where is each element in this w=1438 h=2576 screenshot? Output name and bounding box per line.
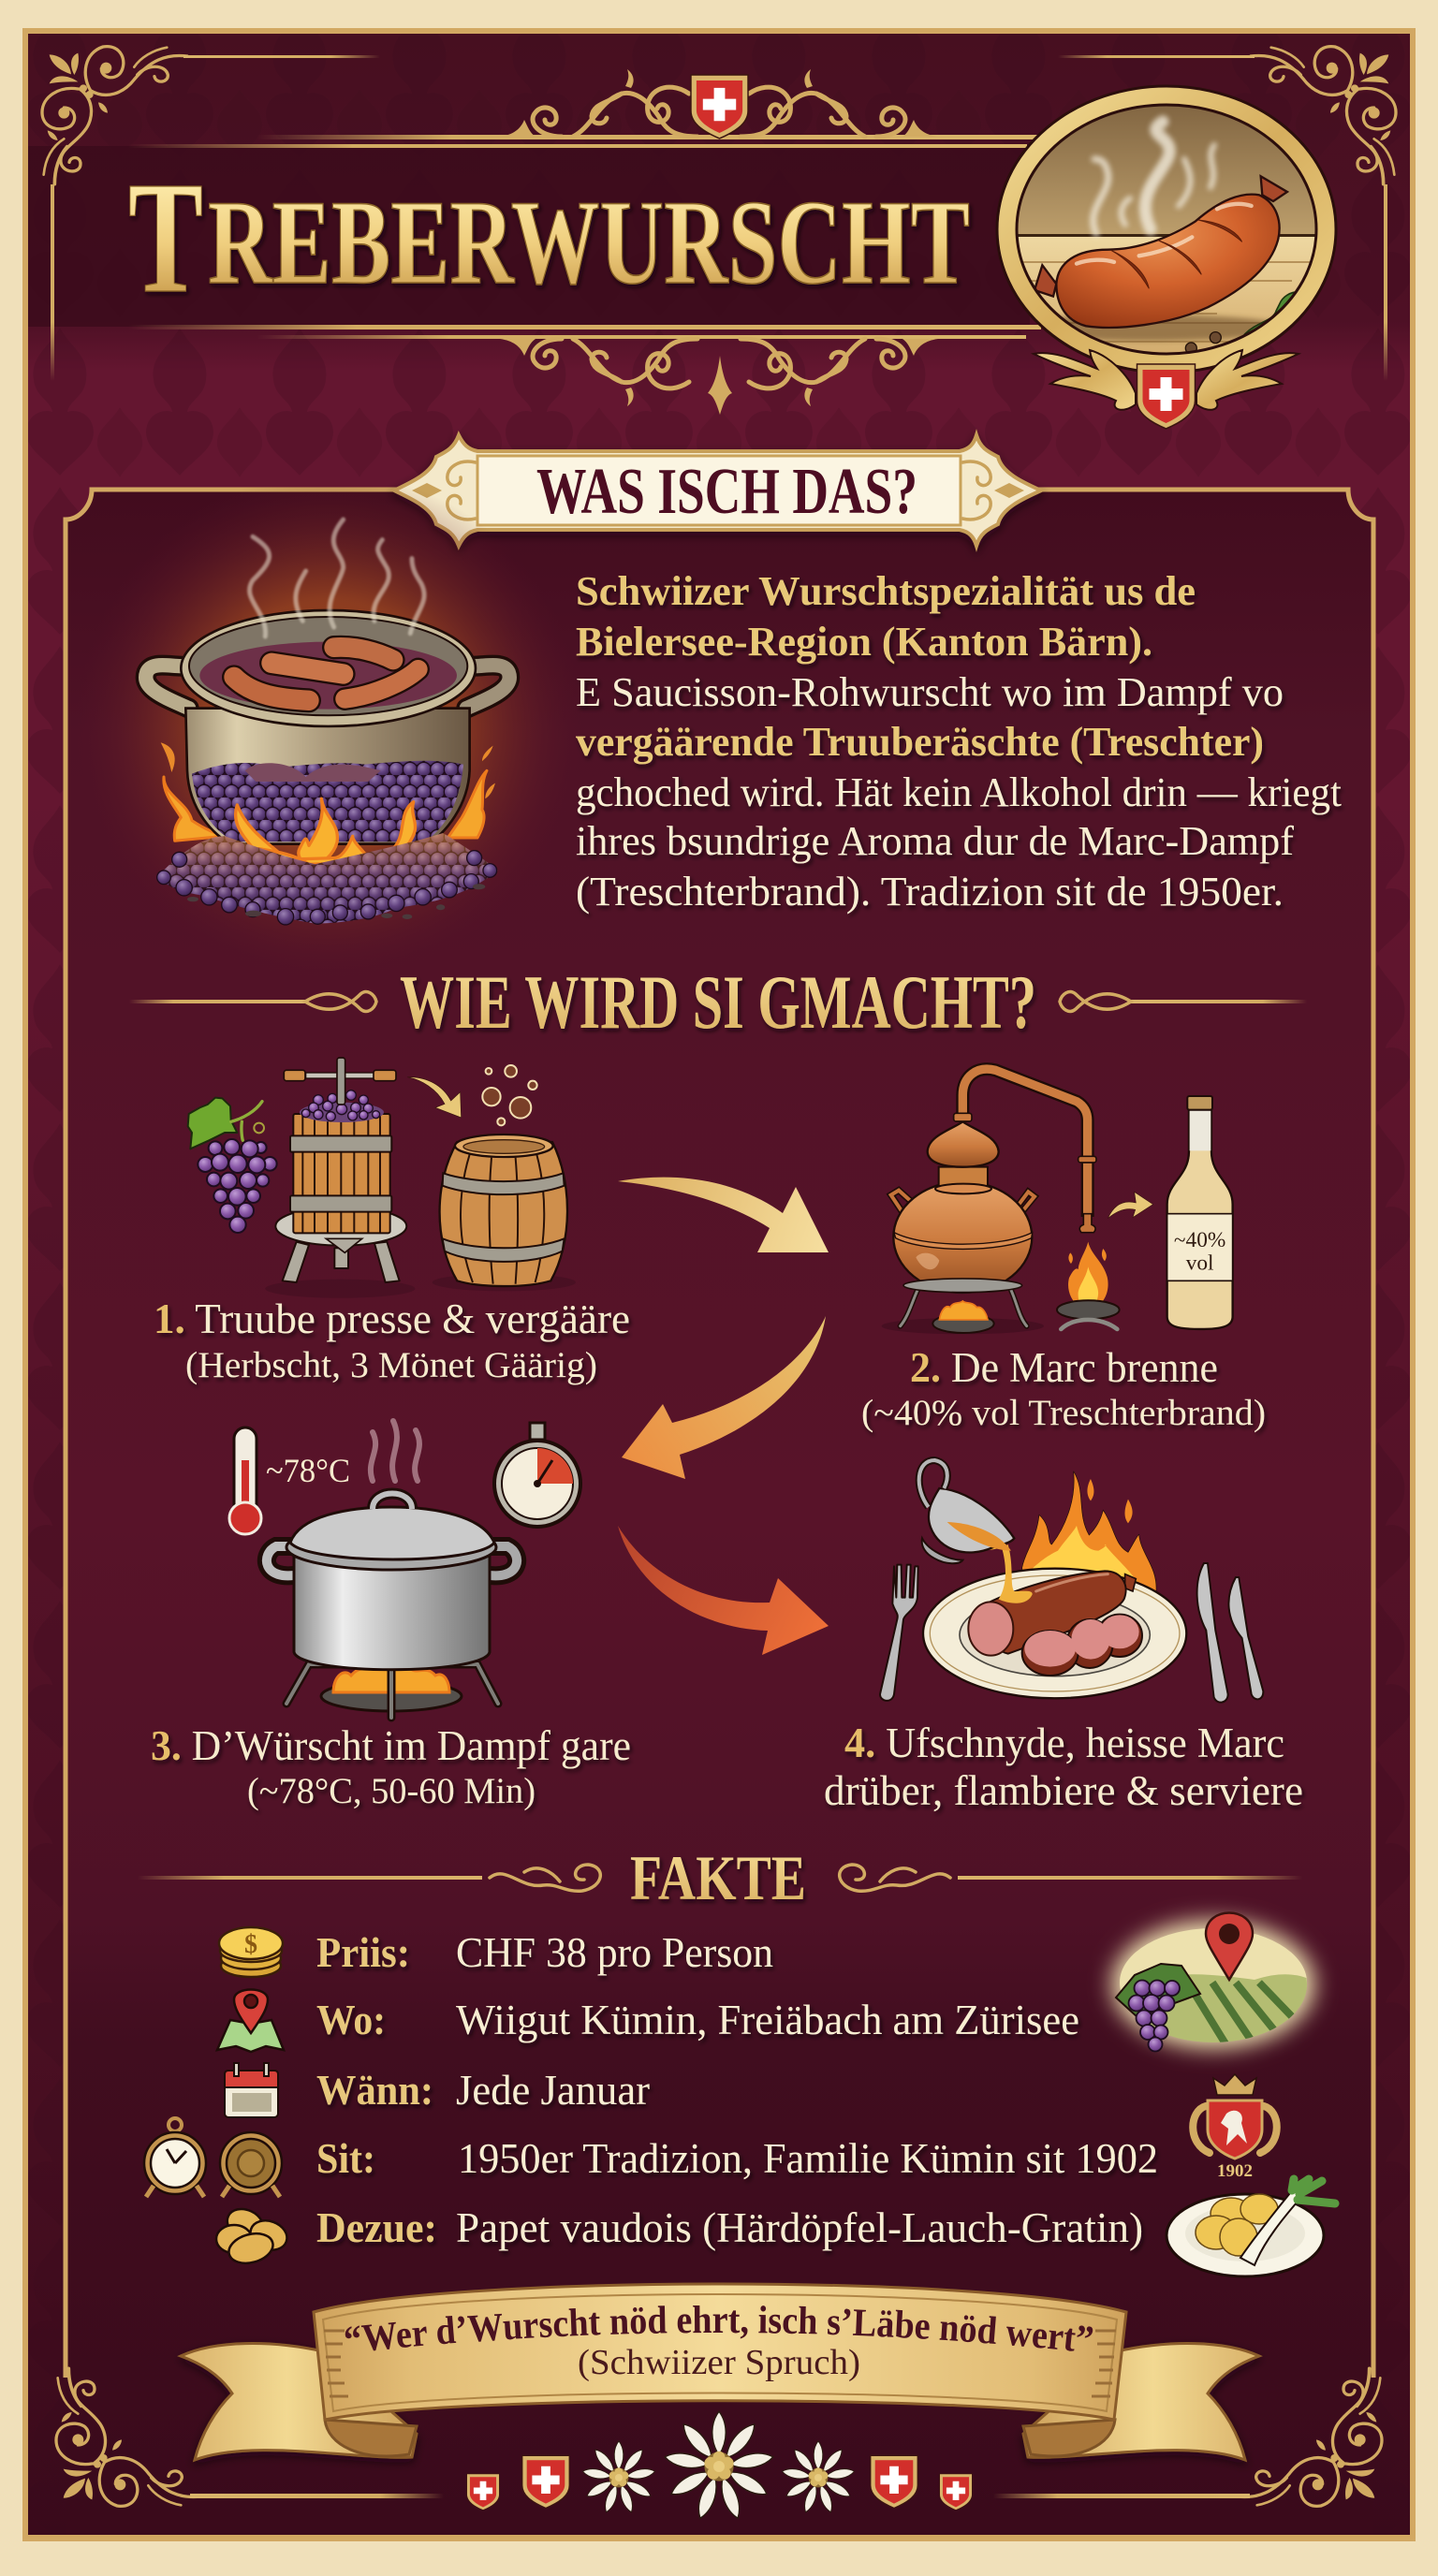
step 4 illustration: flambeed sausage plate	[880, 1460, 1263, 1703]
text block: intro: ihres bsundrige Aroma dur de Marc-Dampf	[576, 818, 1294, 864]
icon: fermentation bubbles	[482, 1065, 537, 1125]
panel outline	[66, 490, 1373, 2378]
banner with quote: “Wer d’Wurscht nöd ehrt, isch s’Läbe nöd wert”	[345, 2305, 1093, 2351]
illustration: simmering pot	[77, 473, 582, 978]
step 1 caption: (Herbscht, 3 Mönet Gäärig)	[185, 1345, 597, 1385]
row: dezue: Dezue:	[316, 2203, 437, 2251]
top corner ornaments	[42, 47, 1396, 381]
text block: intro: Bielersee-Region (Kanton Bärn).	[576, 619, 1152, 665]
text block: intro: (Treschterbrand). Tradizion sit de 1950er.	[576, 869, 1284, 915]
icon: calendar	[225, 2063, 278, 2117]
medallion bottom ornament with shield	[1034, 350, 1299, 429]
step 2 caption	[861, 1344, 1266, 1433]
icon: bottle	[1167, 1096, 1233, 1329]
banner with quote	[143, 2282, 1298, 2497]
bottom decoration: shields and edelweiss	[190, 2411, 1250, 2521]
arrow: step 3 to 4	[618, 1526, 829, 1655]
step 1 caption: 1. Truube presse & vergääre	[154, 1295, 630, 1342]
step 2 illustration: copper still and bottle	[882, 1069, 1233, 1334]
icon: fire	[1057, 1242, 1120, 1329]
icon: bottle: vol	[1186, 1251, 1214, 1276]
title frame lines	[128, 135, 1041, 339]
medallion: sausage	[997, 86, 1336, 376]
heading: fakte: FAKTE	[630, 1842, 806, 1913]
text block: intro: vergäärende Truuberäschte (Treschter)	[576, 719, 1264, 765]
step 3 caption	[151, 1722, 631, 1811]
icon: knife	[1197, 1563, 1228, 1703]
heading plaque: was isch das	[394, 435, 1041, 546]
icon: steam	[371, 1421, 419, 1481]
ribbon curls	[325, 2420, 1115, 2456]
step 3 caption: 3. D’Würscht im Dampf gare	[151, 1722, 631, 1769]
row: wann: Wänn:	[316, 2066, 433, 2114]
vineyard vignette	[1112, 1913, 1314, 2052]
bottom corner ornaments	[56, 2368, 1382, 2506]
family crest 1902: 1902	[1217, 2161, 1253, 2181]
quote	[345, 2333, 1093, 2353]
row: sit: 1950er Tradizion, Familie Kümin sit 1902	[458, 2135, 1158, 2182]
icon: copper still	[882, 1069, 1096, 1334]
row: preis: Priis:	[316, 1928, 410, 1976]
row: wo: Wo:	[316, 1996, 386, 2043]
title	[128, 149, 970, 326]
icon: stock pot	[267, 1494, 517, 1718]
icon: coins	[219, 1927, 283, 1977]
temperature label: ~78°C	[266, 1452, 350, 1489]
heading: fakte	[138, 1842, 1302, 1913]
row: dezue: Papet vaudois (Härdöpfel-Lauch-Gratin)	[456, 2204, 1143, 2251]
row: preis: CHF 38 pro Person	[456, 1929, 773, 1976]
family crest 1902	[1193, 2074, 1277, 2181]
step 4 caption	[824, 1720, 1303, 1814]
icon: map pin	[217, 1990, 284, 2052]
ribbon right tail	[1023, 2344, 1259, 2460]
facts list	[144, 1927, 1158, 2268]
step 4 caption: 4. Ufschnyde, heisse Marc	[844, 1720, 1284, 1766]
icon: sauce pour	[919, 1460, 1033, 1603]
icon: potatoes	[216, 2203, 291, 2268]
quote source: (Schwiizer Spruch)	[578, 2343, 860, 2382]
arrow: step 2 to 3	[622, 1316, 826, 1479]
step 1 caption	[154, 1295, 630, 1385]
text block: intro: E Saucisson-Rohwurscht wo im Dampf vo	[576, 669, 1284, 715]
arrow: step 1 to 2	[618, 1178, 829, 1252]
step 2 caption: (~40% vol Treschterbrand)	[861, 1393, 1266, 1433]
text block: intro: gchoched wird. Hät kein Alkohol drin — kriegt	[576, 769, 1342, 815]
text block: intro	[576, 568, 1342, 915]
step 3 caption: (~78°C, 50-60 Min)	[247, 1771, 536, 1811]
icon: flames	[1022, 1471, 1156, 1591]
icon: thermometer	[229, 1427, 261, 1534]
top ornament with Swiss shield	[500, 69, 938, 139]
row: preis	[316, 1928, 773, 1976]
icon: alarm clock	[144, 2118, 206, 2197]
heading plaque: was isch das: WAS ISCH DAS?	[536, 456, 917, 528]
title: REBERWURSCHT	[208, 175, 970, 309]
icon: wine press	[265, 1058, 415, 1298]
panel: content area	[66, 490, 1373, 2535]
arrow: small into barrel	[407, 1077, 462, 1118]
icon: sausage	[968, 1571, 1142, 1676]
lower title ornament	[500, 339, 938, 415]
arrow: to bottle	[1108, 1192, 1153, 1219]
icon: table knife	[1228, 1577, 1263, 1699]
potato and leek plate	[1167, 2179, 1335, 2276]
step 3 illustration: steaming pot	[229, 1421, 580, 1718]
step 2 caption: 2. De Marc brenne	[910, 1344, 1218, 1391]
row: wann	[316, 2066, 650, 2114]
text block: intro: Schwiizer Wurschtspezialität us de	[576, 568, 1196, 614]
icon: stopwatch	[494, 1423, 580, 1527]
row: sit: Sit:	[316, 2134, 375, 2182]
step 4 caption: drüber, flambiere & serviere	[824, 1767, 1303, 1814]
ribbon left tail	[181, 2344, 417, 2460]
icon: antique clock	[220, 2132, 282, 2197]
step 1 illustration: grape press and barrel	[188, 1058, 576, 1298]
row: wo: Wiigut Kümin, Freiäbach am Zürisee	[456, 1997, 1079, 2043]
title band	[28, 146, 1030, 327]
title: T	[128, 149, 203, 326]
ribbon centre	[314, 2284, 1126, 2420]
icon: fork	[880, 1565, 918, 1701]
icon: coins: $	[244, 1930, 257, 1959]
icon: grape cluster	[188, 1098, 277, 1233]
icon: bottle: ~40%	[1174, 1228, 1225, 1252]
row: wann: Jede Januar	[456, 2067, 650, 2114]
icon: plate	[923, 1569, 1186, 1698]
icon: oak barrel	[433, 1134, 576, 1291]
heading: wie wird si gmacht: WIE WIRD SI GMACHT?	[400, 959, 1036, 1045]
